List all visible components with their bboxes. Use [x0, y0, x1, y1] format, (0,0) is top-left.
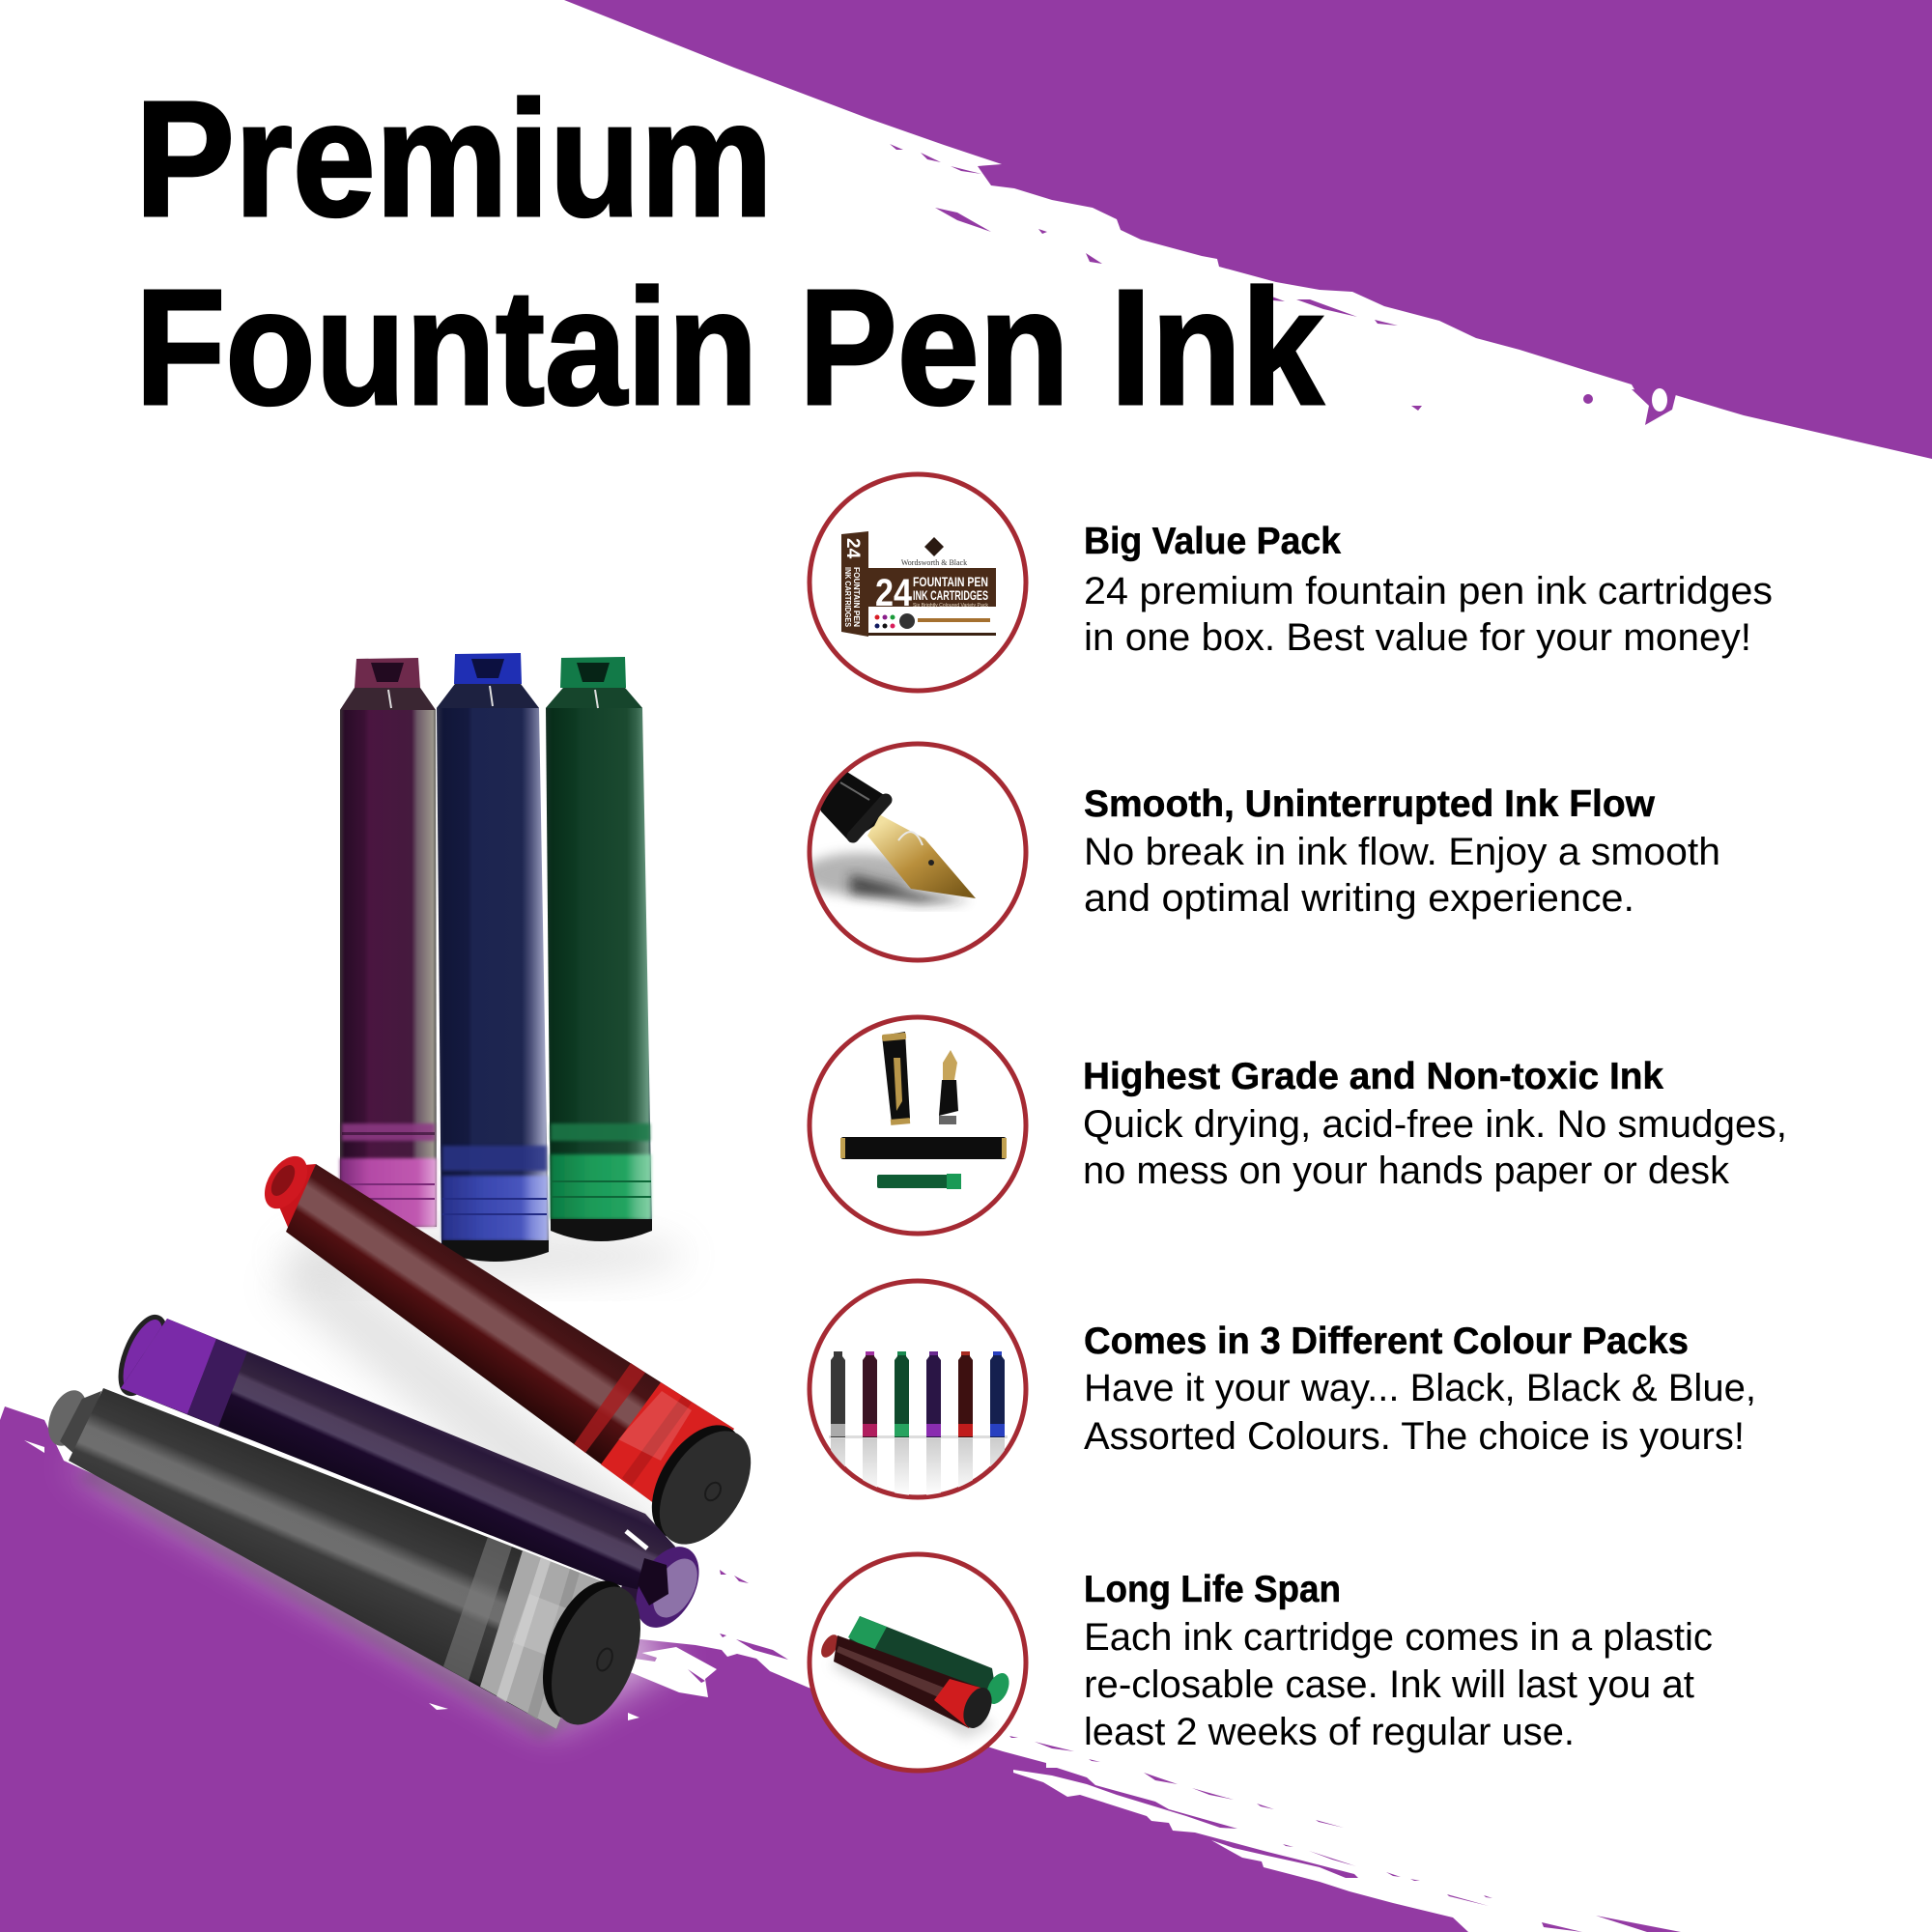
feature 1: icon circle, product box: 24: [842, 538, 863, 559]
feature 2 text: and optimal writing experience.: [1084, 877, 1634, 920]
feature 1 text: in one box. Best value for your money!: [1084, 616, 1751, 659]
feature 2 text: [1084, 783, 1720, 920]
feature 1: icon circle, product box: INK CARTRIDGES: [843, 567, 852, 628]
feature 1 text: 24 premium fountain pen ink cartridges: [1084, 570, 1773, 612]
standing cartridge: magenta: [340, 658, 437, 1227]
feature 5 text: Long Life Span: [1084, 1569, 1341, 1610]
feature 3: icon circle, pen parts: [810, 1017, 1026, 1234]
cartridges group: [41, 653, 770, 1737]
feature 1: icon circle, product box: FOUNTAIN PEN: [913, 574, 988, 589]
feature 2 text: Smooth, Uninterrupted Ink Flow: [1084, 783, 1656, 825]
feature 1 text: [1084, 521, 1773, 659]
feature 4 text: Have it your way... Black, Black & Blue,: [1084, 1367, 1756, 1409]
standing cartridge: blue: [437, 653, 549, 1262]
feature 1 text: Big Value Pack: [1084, 521, 1341, 562]
feature 3 text: Quick drying, acid-free ink. No smudges,: [1083, 1103, 1787, 1146]
feature 1: icon circle, product box: FOUNTAIN PEN: [852, 567, 861, 627]
feature 5 text: [1084, 1569, 1713, 1753]
feature 5 text: Each ink cartridge comes in a plastic: [1084, 1616, 1713, 1659]
feature 1: icon circle, product box: INK CARTRIDGES: [913, 587, 988, 603]
feature 1: icon circle, product box: Wordsworth & Black: [901, 558, 967, 567]
title: Premium: [135, 68, 773, 251]
purple brush stroke: top right: [564, 0, 1932, 459]
feature 3 text: no mess on your hands paper or desk: [1083, 1150, 1730, 1192]
feature 1: icon circle, product box: 24: [875, 572, 913, 614]
feature 5 text: re-closable case. Ink will last you at: [1084, 1663, 1694, 1706]
lying cartridge: purple: [112, 1311, 712, 1638]
feature 4: icon circle, six colour cartridges: [810, 1281, 1026, 1497]
title: [135, 68, 1323, 440]
feature 4 text: Comes in 3 Different Colour Packs: [1084, 1321, 1689, 1362]
lying cartridge: red: [256, 1149, 770, 1560]
feature 1: icon circle, product box: Six Brightly Coloured Variety Pack: [913, 603, 989, 609]
lying cartridge: black: [41, 1385, 658, 1737]
white glow and shadow behind cartridges on purple: [68, 1231, 686, 1739]
feature 5 text: least 2 weeks of regular use.: [1084, 1711, 1575, 1753]
feature 2: icon circle, fountain pen nib: [802, 744, 1026, 960]
standing cartridge: green: [546, 657, 652, 1241]
feature 4 text: Assorted Colours. The choice is yours!: [1084, 1415, 1745, 1458]
feature 2 text: No break in ink flow. Enjoy a smooth: [1084, 831, 1720, 873]
title: Fountain Pen Ink: [135, 256, 1323, 440]
feature 4 text: [1084, 1321, 1756, 1458]
feature 1: icon circle, product box: [810, 474, 1026, 691]
feature 3 text: [1083, 1056, 1787, 1192]
feature 3 text: Highest Grade and Non-toxic Ink: [1083, 1056, 1663, 1097]
feature 5: icon circle, two cartridges: [810, 1554, 1026, 1771]
purple brush stroke: bottom left: [0, 1406, 1681, 1932]
